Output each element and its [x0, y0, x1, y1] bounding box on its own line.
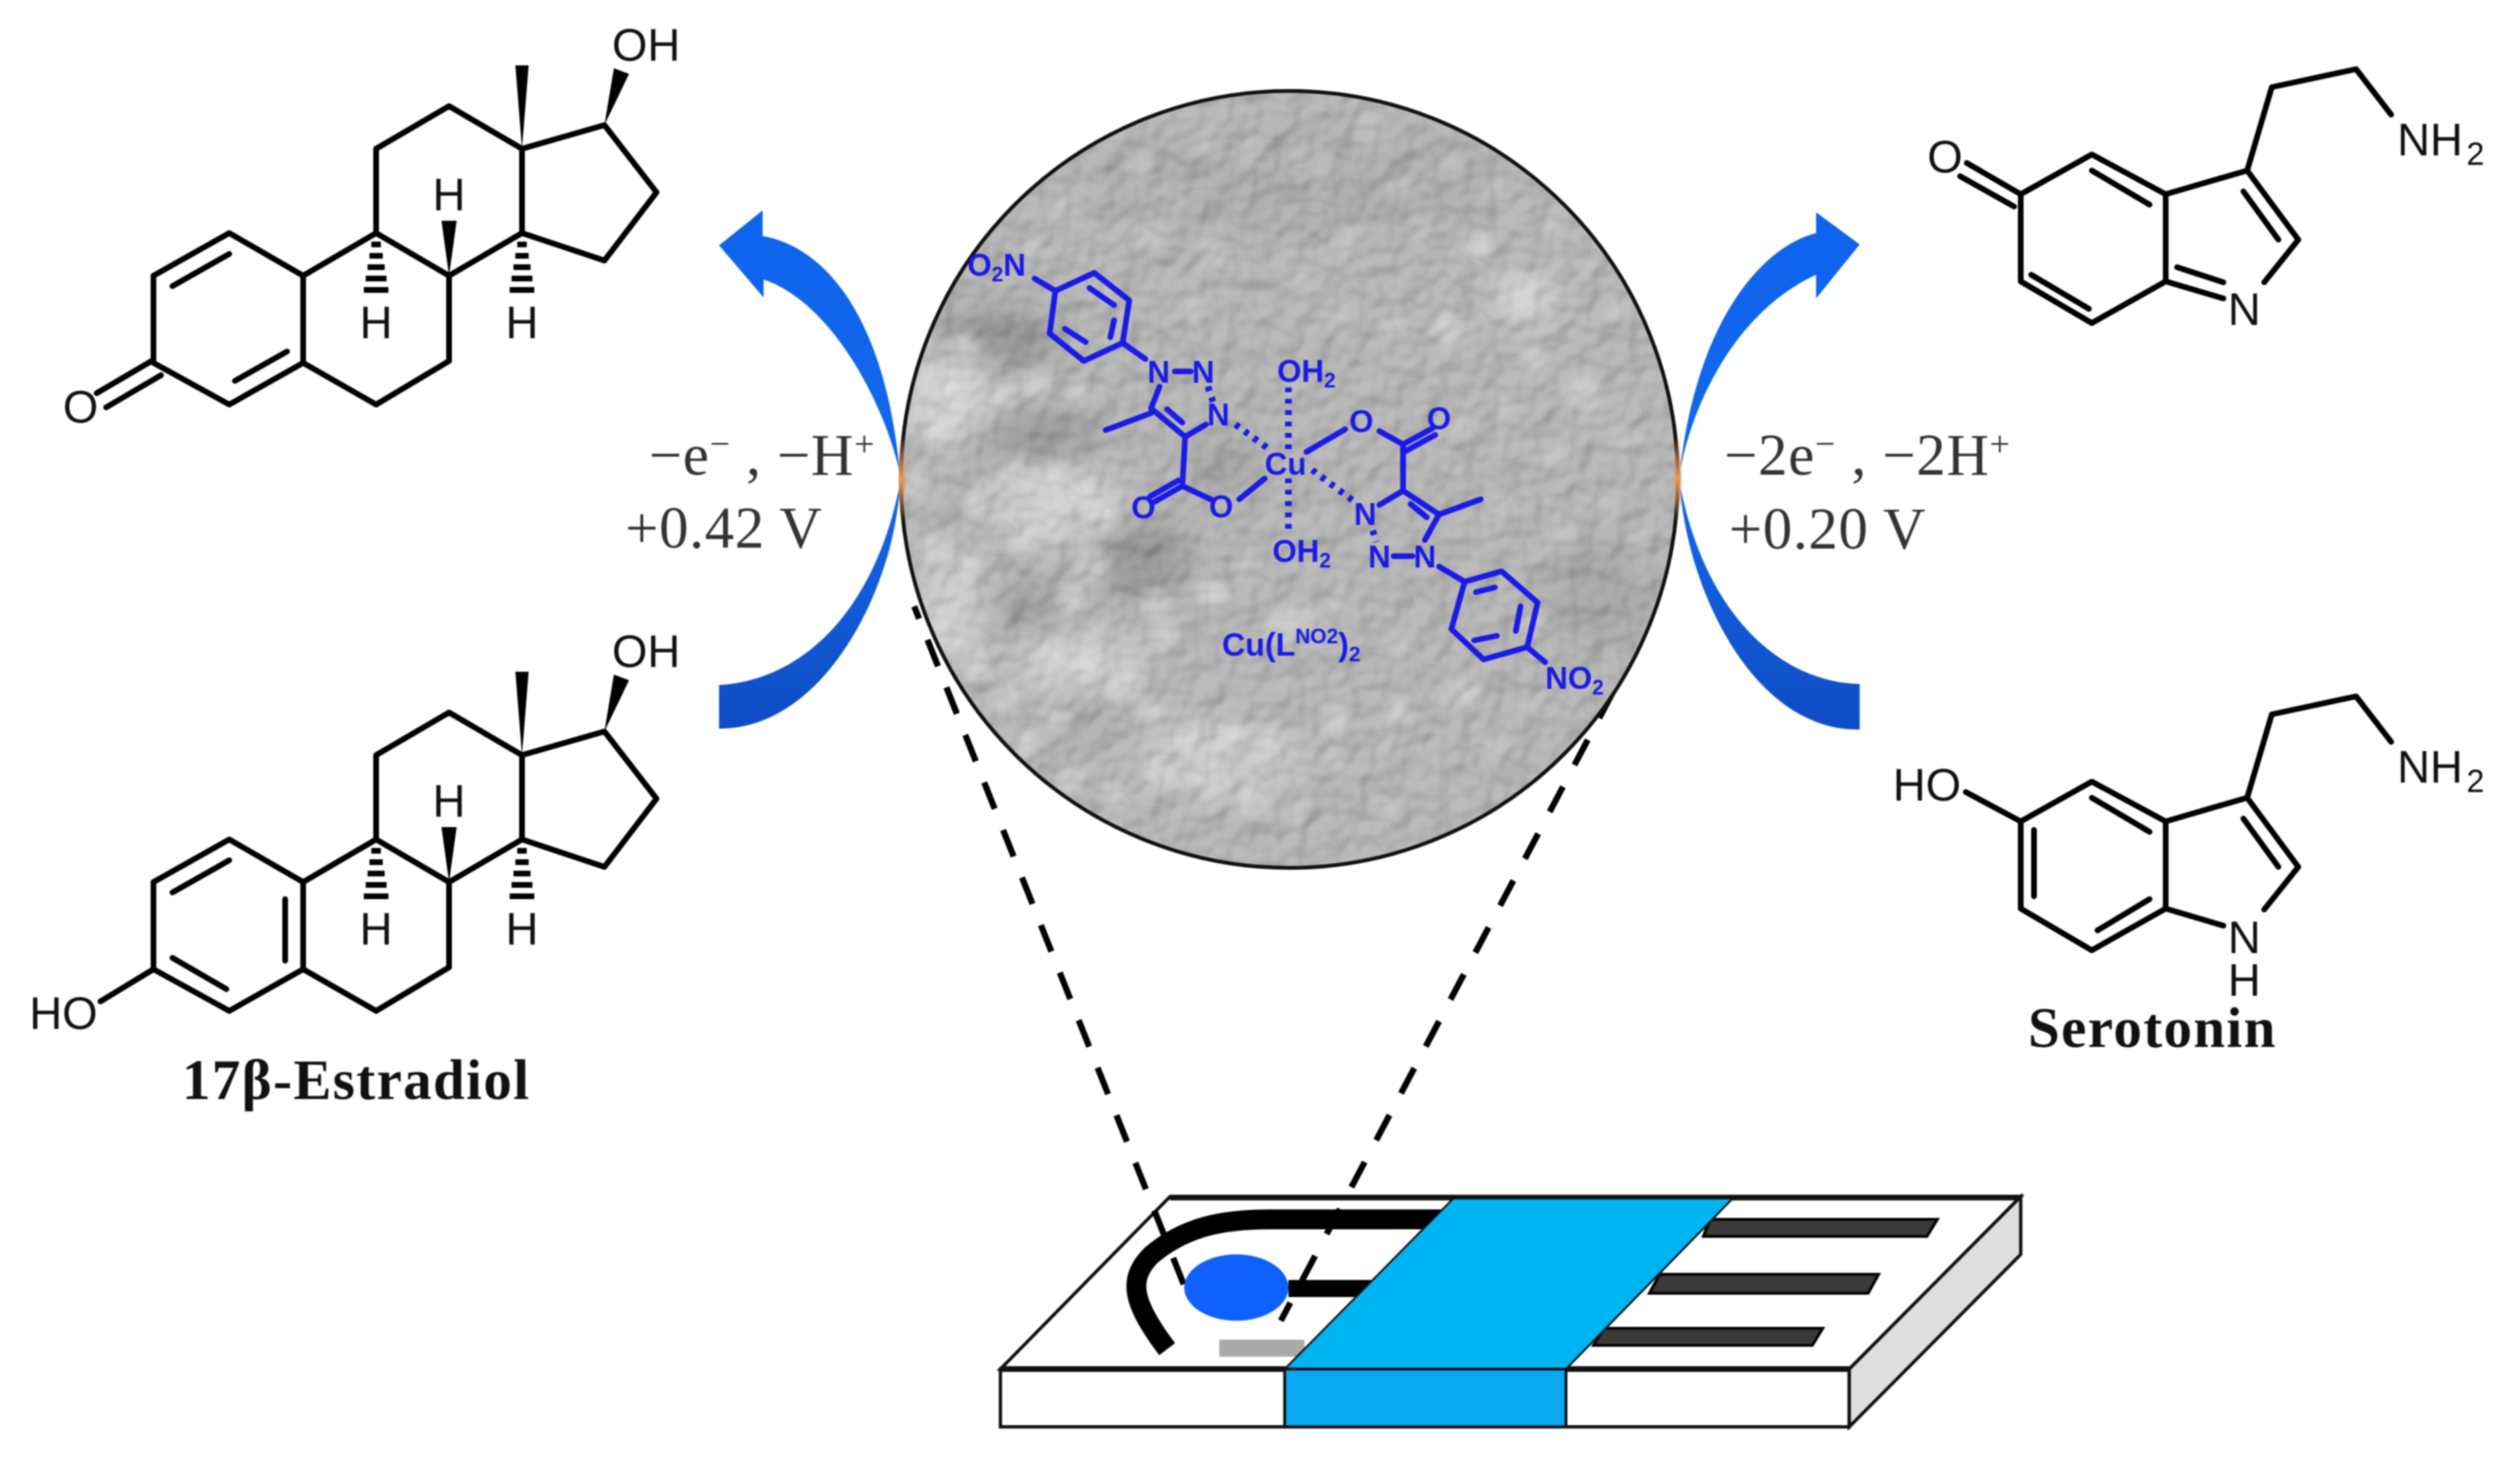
- reaction text: right: −2e: [1724, 424, 1815, 488]
- molecule: oxidized serotonin: NH: [2397, 116, 2463, 166]
- molecule: oxidized estradiol: H: [506, 298, 538, 349]
- chemical structure: Cu complex: [967, 247, 1604, 699]
- label: Serotonin: Serotonin: [2028, 997, 2277, 1059]
- reaction text: left: +0.42 V: [625, 496, 822, 561]
- contact bar top: [1703, 1219, 1937, 1236]
- reaction text: left: [625, 424, 875, 561]
- insulating strip front: [1285, 1369, 1566, 1427]
- chemical structure: Cu complex: O: [1131, 490, 1156, 525]
- arrow: right lower: [1680, 483, 1860, 730]
- chemical structure: Cu complex: Cu: [1265, 446, 1306, 481]
- molecule: oxidized estradiol: OH: [612, 21, 680, 71]
- molecule: serotonin: 2: [2467, 764, 2484, 800]
- molecule: oxidized serotonin: [1927, 69, 2484, 335]
- arrow junction glow: right: [1675, 433, 1681, 524]
- chemical structure: Cu complex: N: [1368, 539, 1391, 574]
- molecule: oxidized serotonin: O: [1927, 133, 1963, 183]
- chemical structure: Cu complex: N: [1354, 496, 1377, 532]
- chemical structure: Cu complex: O: [1427, 401, 1451, 436]
- chemical structure: Cu complex: 2: [1593, 676, 1604, 699]
- reaction text: right: , −2H: [1836, 424, 1989, 488]
- screen-printed electrode device: [1000, 1197, 2021, 1427]
- molecule: 17β-estradiol: [29, 627, 680, 1039]
- contact bar bottom: [1593, 1328, 1823, 1345]
- arrow: left lower: [719, 483, 900, 729]
- molecule: 17β-estradiol: H: [360, 905, 392, 955]
- arrow: right upper: [1680, 212, 1860, 474]
- molecule: 17β-estradiol: HO: [29, 989, 98, 1039]
- molecule: oxidized estradiol: H: [360, 298, 392, 349]
- molecule: oxidized serotonin: 2: [2467, 136, 2484, 172]
- chemical structure: Cu complex: N: [1003, 247, 1026, 282]
- reaction text: right: +0.20 V: [1729, 497, 1926, 562]
- dashed zoom line: left: [914, 606, 1184, 1286]
- arrow junction glow: left: [898, 433, 906, 524]
- reaction text: right: −: [1815, 424, 1836, 464]
- molecule: oxidized serotonin: N: [2228, 285, 2260, 335]
- molecule: serotonin: H: [2228, 956, 2260, 1006]
- reaction text: left: −e: [649, 424, 710, 488]
- chemical structure: Cu complex: O: [967, 247, 992, 282]
- chemical structure: Cu complex: N: [1147, 354, 1170, 389]
- chemical structure: Cu complex: O: [1349, 404, 1374, 439]
- chemical structure: Cu complex: OH: [1277, 353, 1324, 388]
- chemical structure: Cu complex: N: [1413, 539, 1436, 574]
- molecule: serotonin: N: [2228, 913, 2260, 964]
- chemical structure: Cu complex: N: [1207, 397, 1230, 432]
- working electrode spot: [1184, 1254, 1288, 1321]
- chemical structure: Cu complex: 2: [1320, 549, 1331, 572]
- chemical structure: Cu complex: OH: [1272, 533, 1320, 568]
- reaction text: right: [1724, 424, 2010, 562]
- molecule: serotonin: HO: [1893, 761, 1961, 811]
- chemical structure: Cu complex: 2: [1324, 369, 1336, 392]
- molecule: 17β-estradiol: H: [433, 777, 465, 827]
- chemical structure: Cu complex: N: [1192, 354, 1215, 389]
- chemical structure: Cu complex: NO: [1545, 660, 1593, 695]
- molecule: 17β-estradiol: OH: [612, 627, 680, 677]
- counter electrode pad: [1219, 1340, 1305, 1357]
- label: 17β-Estradiol: 17β-Estradiol: [182, 1049, 531, 1111]
- contact bar middle: [1649, 1274, 1879, 1293]
- molecule: oxidized estradiol: O: [63, 383, 99, 433]
- panel: SEM micrograph circle: [898, 90, 1682, 872]
- molecule: serotonin: [1893, 696, 2484, 1006]
- arrow: left upper: [719, 210, 900, 474]
- working electrode lead: [1288, 1280, 1376, 1297]
- chemical structure: Cu complex: ): [1339, 627, 1349, 663]
- reaction text: right: +: [1989, 424, 2010, 464]
- chemical structure: Cu complex: NO2: [1295, 624, 1339, 648]
- chemical structure: Cu complex: O: [1209, 489, 1233, 524]
- molecule: oxidized estradiol: H: [433, 171, 465, 221]
- reaction text: left: , −H: [730, 424, 855, 488]
- chemical structure: Cu complex: 2: [992, 262, 1003, 286]
- molecule: serotonin: NH: [2397, 743, 2463, 793]
- reaction text: left: −: [710, 424, 730, 464]
- dashed zoom line: right: [1281, 652, 1634, 1321]
- chemical structure: Cu complex: Cu(L: [1222, 627, 1295, 663]
- chemical structure: Cu complex: 2: [1349, 642, 1360, 666]
- reaction text: left: +: [855, 424, 875, 464]
- insulating strip top: [1285, 1199, 1733, 1369]
- molecule: 17β-estradiol: H: [506, 905, 538, 955]
- reference electrode arc: [1137, 1219, 1442, 1349]
- molecule: oxidized estradiol: [63, 21, 680, 433]
